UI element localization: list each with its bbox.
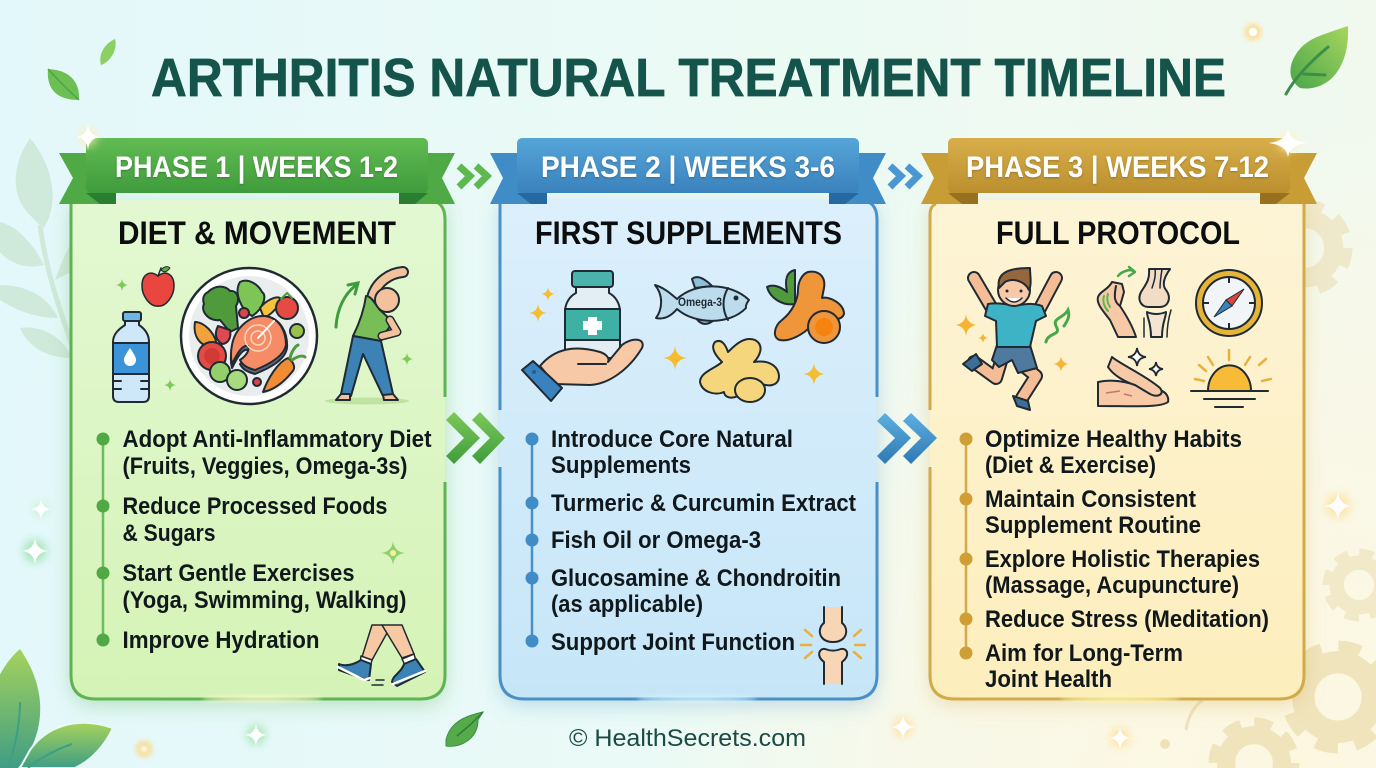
list item: holistic therapies: Explore Holistic Therapies	[985, 546, 1260, 573]
heading: phase 1 weeks: PHASE 1 | WEEKS 1-2	[115, 151, 398, 184]
ribbon banner phase 2	[490, 138, 886, 204]
footer copyright: © HealthSecrets.com	[569, 725, 806, 752]
list item: core supplements: Introduce Core Natural	[551, 426, 793, 453]
icon: walking feet	[338, 625, 425, 686]
list item: healthy habits: (Diet & Exercise)	[985, 452, 1156, 479]
list item: supplement routine: Maintain Consistent	[985, 486, 1196, 513]
arrow: large green chevrons	[446, 412, 505, 464]
list item: adopt diet: (Fruits, Veggies, Omega-3s)	[122, 453, 408, 480]
decorative faded plant at left	[0, 138, 75, 358]
panel 1 border	[71, 203, 445, 699]
glow dots	[135, 23, 1262, 758]
list item: core supplements	[551, 426, 793, 479]
icon: omega-3 fish	[655, 277, 749, 324]
icon: sunrise	[1191, 350, 1271, 407]
small green sparkles	[116, 279, 413, 391]
list item: long-term health: Joint Health	[985, 666, 1112, 693]
list item: holistic therapies	[985, 546, 1260, 599]
icon: massage	[1098, 348, 1168, 406]
leaves at bottom left	[0, 649, 113, 768]
panel 3 background	[930, 200, 1304, 699]
list item: fish oil: Fish Oil or Omega-3	[551, 527, 761, 554]
list item: core supplements: Supplements	[551, 452, 691, 479]
list item: reduce foods	[122, 493, 388, 547]
panel: phase 2	[490, 138, 886, 702]
list item: healthy habits: Optimize Healthy Habits	[985, 426, 1242, 453]
sparkle in panel 1	[381, 541, 405, 565]
panel 2 background	[500, 200, 877, 699]
icon: hand joints	[1098, 267, 1136, 337]
icon: ginger	[700, 339, 779, 402]
panel: phase 1	[59, 138, 455, 702]
icon: jumping boy	[955, 268, 1069, 410]
timeline rail phase 2	[526, 432, 538, 648]
title: ARTHRITIS NATURAL TREATMENT TIMELINE	[151, 48, 1226, 108]
list item: joint function: Support Joint Function	[551, 629, 795, 656]
ribbon banner phase 1	[59, 138, 455, 204]
icon: apple	[142, 267, 174, 306]
list item: gentle exercises	[122, 560, 406, 614]
panel 2 border	[500, 203, 877, 699]
leaf: bottom centre	[446, 712, 483, 746]
icon: stretching person	[325, 272, 409, 404]
ribbon banner phase 3	[921, 138, 1317, 204]
leaf: top left large	[48, 69, 79, 100]
arrow: small green chevrons	[459, 166, 487, 187]
leaf: top right	[1286, 26, 1348, 94]
list item: reduce stress: Reduce Stress (Meditation)	[985, 606, 1269, 633]
decorative gears at right	[1160, 205, 1376, 768]
panel 3 border	[930, 204, 1304, 699]
list item: hydration: Improve Hydration	[122, 627, 320, 654]
list item: glucosamine: Glucosamine & Chondroitin	[551, 565, 841, 592]
icon: knee bones	[1139, 269, 1171, 337]
panel 1 background	[71, 200, 445, 699]
icon: compass	[1196, 270, 1262, 336]
arrow: large blue chevrons	[877, 413, 937, 464]
list item: gentle exercises: Start Gentle Exercises	[122, 560, 354, 587]
list item: long-term health: Aim for Long-Term	[985, 640, 1183, 667]
timeline rail phase 1	[96, 432, 110, 646]
icon: turmeric	[767, 270, 844, 343]
panel: phase 3	[921, 138, 1317, 702]
icon: water bottle	[113, 312, 149, 402]
heading: first supplements: FIRST SUPPLEMENTS	[535, 215, 842, 251]
list item: holistic therapies: (Massage, Acupuncture)	[985, 572, 1239, 599]
list item: adopt diet: Adopt Anti-Inflammatory Diet	[122, 426, 432, 453]
heading: full protocol: FULL PROTOCOL	[996, 215, 1240, 251]
list item: long-term health	[985, 640, 1183, 693]
heading: diet and movement: DIET & MOVEMENT	[118, 215, 396, 251]
sparkles in background	[22, 492, 1352, 749]
heading: phase 3 weeks: PHASE 3 | WEEKS 7-12	[966, 151, 1269, 184]
leaf: top left small	[100, 39, 116, 65]
list item: turmeric: Turmeric & Curcumin Extract	[551, 490, 856, 517]
list item: reduce foods: Reduce Processed Foods	[122, 493, 388, 520]
list item: glucosamine: (as applicable)	[551, 591, 703, 618]
list item: reduce foods: & Sugars	[122, 520, 216, 547]
arrow: small blue chevrons	[890, 166, 918, 187]
icon: food plate	[181, 268, 317, 404]
icon: supplement bottle in hand	[522, 271, 643, 401]
list item: supplement routine	[985, 486, 1201, 539]
list item: adopt diet	[122, 426, 432, 480]
list item: glucosamine	[551, 565, 841, 618]
list item: gentle exercises: (Yoga, Swimming, Walking)	[122, 587, 406, 614]
heading: phase 2 weeks: PHASE 2 | WEEKS 3-6	[541, 151, 835, 184]
list item: supplement routine: Supplement Routine	[985, 512, 1201, 539]
timeline rail phase 3	[960, 432, 972, 660]
sparkle: top left of banner 1	[76, 124, 100, 150]
gold sparkles	[529, 287, 825, 385]
sparkle: top right of banner 3	[1268, 129, 1308, 157]
icon: knee joint	[801, 607, 865, 684]
icon: omega-3 fish: Omega-3	[678, 297, 722, 309]
list item: healthy habits	[985, 426, 1242, 479]
